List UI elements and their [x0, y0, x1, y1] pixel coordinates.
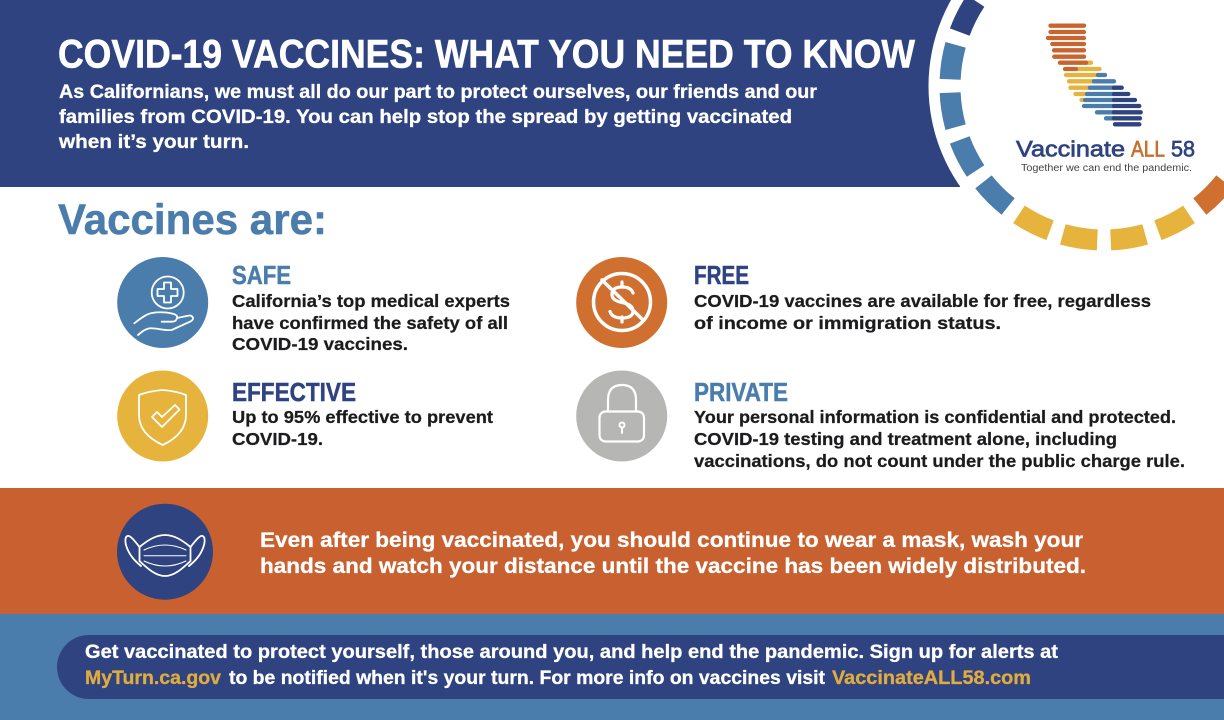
call-to-action text	[85, 642, 1059, 689]
safe body: COVID-19 vaccines.	[232, 334, 408, 354]
effective body: COVID-19.	[232, 429, 323, 449]
logo: Vaccinate ALL 58	[1016, 26, 1195, 174]
call-to-action pill	[57, 635, 1224, 699]
private body: COVID-19 testing and treatment alone, including	[694, 429, 1117, 449]
intro text: families from COVID-19. You can help stop the spread by getting vaccinated	[59, 107, 792, 128]
panel: call to action	[0, 614, 1224, 720]
icon: crossed-out dollar	[576, 257, 667, 348]
effective body: Up to 95% effective to prevent	[232, 407, 493, 427]
segmented ring	[888, 0, 1224, 302]
private body: vaccinations, do not count under the public charge rule.	[694, 451, 1185, 471]
intro text: As Californians, we must all do our part to protect ourselves, our friends and our	[59, 82, 818, 103]
logo wordmark	[1016, 136, 1195, 162]
reminder text: Even after being vaccinated, you should continue to wear a mask, wash your	[260, 528, 1084, 552]
icon: hand with medical cross	[117, 257, 208, 348]
free body: of income or immigration status.	[694, 313, 1001, 333]
icon: face mask	[117, 504, 213, 600]
call-to-action text: MyTurn.ca.gov	[85, 668, 221, 689]
free body: COVID-19 vaccines are available for free, regardless	[694, 291, 1151, 311]
icon: striped California map	[1048, 26, 1141, 124]
reminder text: hands and watch your distance until the vaccine has been widely distributed.	[260, 554, 1086, 578]
private body: Your personal information is confidential and protected.	[694, 407, 1176, 427]
safe heading: SAFE	[232, 260, 291, 290]
call-to-action text: VaccinateALL58.com	[832, 668, 1031, 689]
call-to-action text: Get vaccinated to protect yourself, those around you, and help end the pandemic. Sign up for alerts at	[85, 642, 1059, 663]
item: effective	[117, 370, 493, 462]
item: private	[576, 370, 1185, 471]
panel: mask reminder	[0, 488, 1224, 614]
effective body	[232, 407, 493, 449]
safe body	[232, 291, 510, 354]
icon: shield with check	[117, 370, 208, 462]
free heading: FREE	[694, 260, 749, 290]
reminder text	[260, 528, 1086, 578]
private heading: PRIVATE	[694, 377, 788, 407]
call-to-action text: to be notified when it's your turn. For more info on vaccines visit	[229, 668, 826, 689]
logo wordmark: Vaccinate	[1016, 136, 1125, 162]
intro text: when it’s your turn.	[58, 132, 249, 153]
heading: Vaccines are: Vaccines are:	[58, 196, 327, 244]
logo wordmark: ALL	[1131, 136, 1165, 162]
item: free	[576, 257, 1151, 348]
free body	[694, 291, 1151, 333]
icon: padlock	[576, 370, 667, 462]
logo tagline: Together we can end the pandemic.	[1021, 163, 1192, 174]
header banner	[0, 0, 1224, 262]
safe body: have confirmed the safety of all	[232, 313, 508, 333]
private body	[694, 407, 1185, 471]
effective heading: EFFECTIVE	[232, 377, 356, 407]
logo wordmark: 58	[1171, 136, 1195, 162]
item: safe	[117, 257, 510, 354]
title: COVID-19 VACCINES: WHAT YOU NEED TO KNOW	[58, 32, 915, 76]
safe body: California’s top medical experts	[232, 291, 510, 311]
intro text	[58, 82, 818, 153]
